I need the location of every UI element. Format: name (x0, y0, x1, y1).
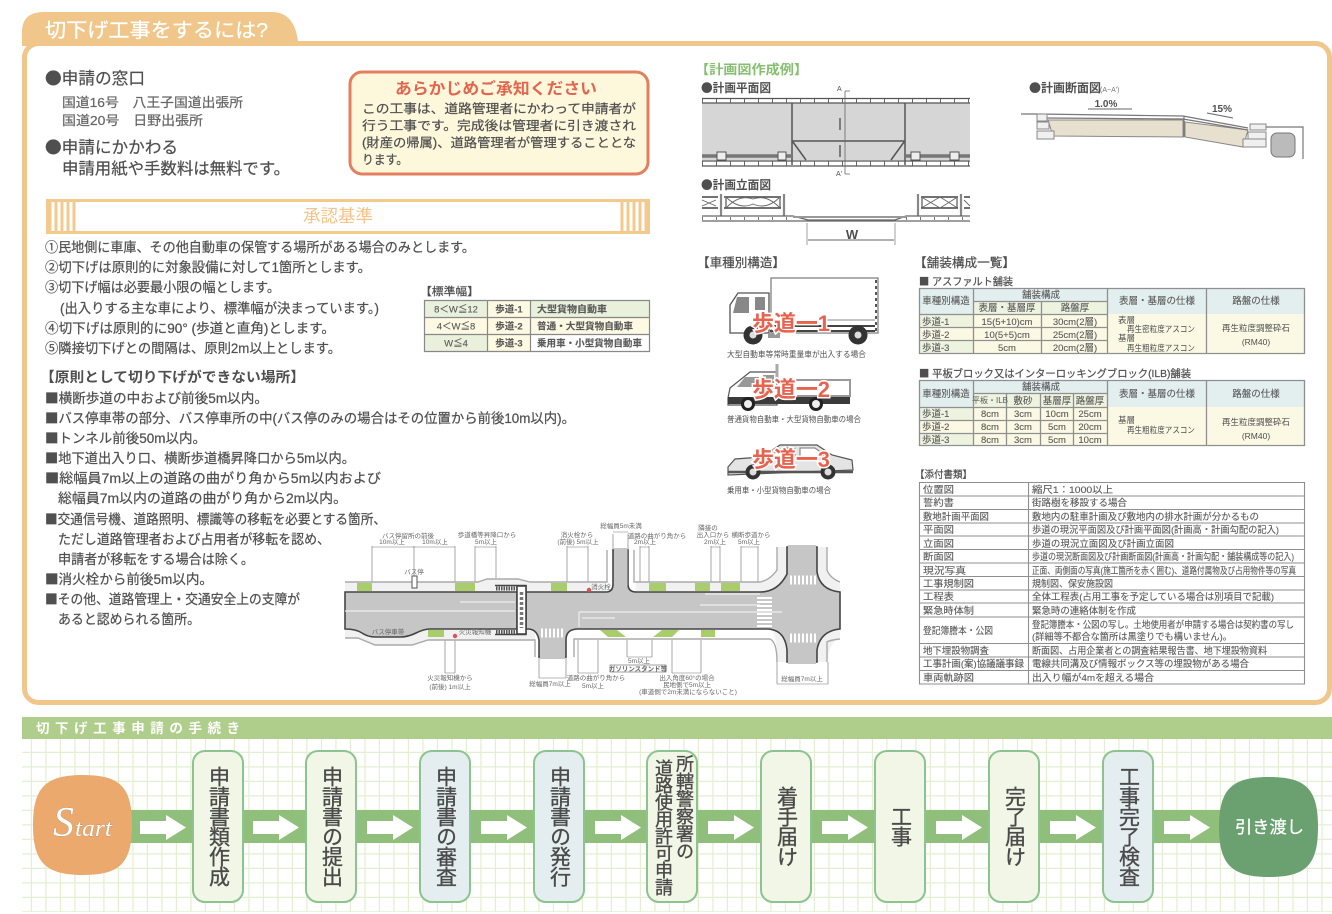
callout: please note: この工事は、道路管理者にかわって申請者が (362, 101, 637, 116)
table: asphalt pavement: 10(5+5)cm (984, 330, 1030, 341)
list: places where cuts are not allowed: ■トンネル前後50m以内。 (45, 427, 206, 447)
list: approval criteria items: ①民地側に車庫、その他自動車の保管する場所がある場合のみとします。 (45, 240, 475, 255)
heading: procedure title: 切下げ工事申請の手続き (36, 720, 240, 736)
table: standard width: 歩道-3 (495, 338, 523, 350)
table: asphalt pavement: 路盤厚 (1061, 302, 1090, 314)
step: completion inspection (1103, 751, 1153, 902)
text block: application office: ●申請の窓口 (45, 65, 145, 89)
heading tab: 切下げ工事をするには? (45, 19, 268, 42)
table: block pavement: 8cm (981, 435, 999, 446)
table: block pavement: 表層・基層の仕様 (1119, 388, 1195, 400)
table: block pavement: 8cm (981, 422, 999, 433)
green planting strips (357, 583, 740, 637)
step: start notice (761, 751, 811, 902)
table: attached documents (915, 468, 1305, 684)
table: standard width: 普通・大型貨物自動車 (537, 320, 633, 332)
table: asphalt pavement: 再生粗粒度アスコン (1127, 343, 1195, 353)
table: attached documents: 工事計画(案)協議議事録 (923, 658, 1024, 670)
diagram: section view: ●計画断面図 (1029, 79, 1101, 96)
list: places where cuts are not allowed: 【原則として切り下げができない場所】 (40, 369, 305, 385)
table: block pavement: 平板・ILB (972, 395, 1008, 405)
table: block pavement: 歩道-1 (922, 408, 949, 420)
road labels: (車道側で2m未満にならないこと) (639, 687, 737, 696)
heading: plan drawing example: 【計画図作成例】 (695, 62, 808, 77)
road labels: 火災報知機から (427, 673, 473, 682)
table: asphalt pavement: 基層 (1118, 333, 1135, 343)
road labels: 5m以上 (628, 656, 651, 665)
road labels: 2m以上 (634, 537, 657, 546)
start badge: S (53, 800, 74, 846)
diagram: plan view: ●計画平面図 (701, 79, 771, 96)
table: attached documents: 緊急時体制 (923, 605, 974, 617)
table: block pavement: 再生粒度調整砕石 (1222, 417, 1290, 427)
table: block pavement: 3cm (1014, 435, 1032, 446)
road labels: バス停車帯 (372, 627, 405, 636)
table: asphalt pavement: (RM40) (1242, 337, 1270, 347)
road diagram (345, 521, 840, 696)
list: places where cuts are not allowed: ■その他、道路管理上・交通安全上の支障が (45, 588, 300, 608)
step: issue: 申請書の発行 (548, 766, 571, 887)
step: submit: 申請書の提出 (320, 766, 343, 887)
road labels: バス停留所の前後 (382, 531, 434, 540)
table: attached documents: 敷地内の駐車計画及び敷地内の排水計画が分かるもの (1032, 511, 1259, 523)
road labels: 2m以上 (704, 537, 727, 546)
step: police permit: 道路使用許可申請 (653, 759, 673, 897)
road labels: 消火栓から (561, 530, 593, 539)
text block: application fees (45, 134, 290, 178)
table: block pavement: 車種別構造 (922, 388, 970, 400)
icon: passenger car: 乗用車・小型貨物自動車の場合 (727, 485, 831, 495)
table: asphalt pavement (919, 274, 1305, 354)
diagram: section view: (A−A') (1100, 87, 1119, 94)
flow bar (125, 810, 1225, 843)
table: standard width: 歩道-1 (495, 304, 523, 316)
table: asphalt pavement: 表層・基層の仕様 (1119, 295, 1195, 307)
road labels: 歩道橋等昇降口から (458, 530, 516, 539)
callout: please note: (財産の帰属)、道路管理者が管理することとな (362, 135, 636, 150)
road labels: 出入角度60°の場合 (659, 673, 715, 682)
table: block pavement: 3cm (1014, 409, 1032, 420)
table: block pavement: 20cm (1078, 422, 1102, 433)
step: completion notice (989, 751, 1039, 902)
diagram: elevation view: ●計画立面図 (701, 176, 771, 193)
table: attached documents: 歩道の現況立面図及び計画立面図 (1032, 538, 1174, 550)
road labels: 民地側で5m以上 (663, 680, 712, 689)
table: attached documents: 断面図 (923, 551, 954, 563)
list: places where cuts are not allowed (40, 369, 575, 627)
table: asphalt pavement: 歩道-2 (922, 329, 949, 341)
table: block pavement: (RM40) (1242, 431, 1270, 441)
callout: please note: あらかじめご承知ください (395, 79, 597, 98)
table: attached documents: 出入り幅が4mを超える場合 (1032, 672, 1155, 684)
table: asphalt pavement: 再生密粒度アスコン (1127, 324, 1195, 334)
diagram: section view (1021, 79, 1303, 159)
road dimension lines (372, 534, 828, 684)
road labels: バス停 (404, 567, 424, 576)
table: attached documents: 電線共同溝及び情報ボックス等の埋設物がある場合 (1032, 658, 1249, 670)
table: asphalt pavement: 25cm(2層) (1053, 330, 1097, 341)
diagram: plan view: A (837, 86, 842, 93)
icon: passenger car: 歩道一3 (752, 447, 830, 472)
diagram: section view: 1.0% (1095, 99, 1118, 110)
list: approval criteria items: ④切下げは原則的に90° (歩道と直角)とします。 (45, 321, 335, 336)
table: attached documents: 全体工程表(占用工事を予定している場合は別項目で記載) (1032, 591, 1274, 603)
sidewalk fill (345, 547, 840, 662)
road labels: 5m以上 (582, 681, 605, 690)
road labels: 火災報知機 (459, 627, 492, 636)
table: block pavement: 3cm (1014, 422, 1032, 433)
table: asphalt pavement: 表層・基層厚 (978, 302, 1036, 314)
table: block pavement: 5cm (1048, 422, 1066, 433)
table: block pavement: 10cm (1045, 409, 1069, 420)
table: block pavement: 8cm (981, 409, 999, 420)
step: police permit (647, 751, 697, 902)
table: block pavement: 敷砂 (1013, 395, 1033, 407)
text block: application fees: ●申請にかかわる (45, 134, 178, 158)
road labels: 総幅員7m以上 (529, 679, 571, 688)
table: asphalt pavement: 歩道-1 (922, 316, 949, 328)
table: asphalt pavement: 15(5+10)cm (982, 317, 1033, 328)
road labels: 道路の曲がり角から (567, 673, 625, 682)
banner: approval criteria: 承認基準 (303, 206, 373, 226)
table: attached documents: 地下埋設物調査 (923, 645, 989, 657)
start badge (33, 775, 132, 875)
table: attached documents: 縮尺1：1000以上 (1032, 484, 1114, 496)
bus stop and hydrant marks (412, 576, 591, 638)
diagram: plan view: A' (836, 171, 842, 178)
road labels: 消火栓 (591, 582, 611, 591)
table: attached documents: 断面図、占用企業者との調査結果報告書、地下埋設物資料 (1032, 645, 1267, 657)
step: submit (306, 751, 356, 902)
icon: large truck: 大型自動車等常時重量車が出入する場合 (727, 349, 866, 359)
diagram: elevation view: W (846, 227, 859, 242)
list: places where cuts are not allowed: ■横断歩道の中および前後5m以内。 (45, 387, 268, 407)
road labels: ガソリンスタンド等 (609, 664, 668, 673)
list: places where cuts are not allowed: 申請者が移転をする場合は除く。 (58, 552, 254, 567)
diagram: plan view (701, 79, 970, 178)
table: standard width: 8＜W≦12 (434, 304, 478, 316)
table: asphalt pavement: 歩道-3 (922, 342, 949, 354)
end badge: handover (1219, 777, 1318, 877)
text block: application office: 国道16号 八王子国道出張所 (62, 95, 243, 110)
table: block pavement: 基層厚 (1043, 395, 1072, 407)
table: block pavement: 路盤厚 (1076, 395, 1105, 407)
banner: approval criteria (48, 200, 648, 233)
heading tab (22, 12, 298, 50)
arrows between steps (140, 815, 1210, 840)
road labels: 5m以上 (475, 537, 498, 546)
table: standard width: W≦4 (444, 338, 468, 350)
list: places where cuts are not allowed: あると認められる箇所。 (58, 611, 200, 627)
table: asphalt pavement: 表層 (1118, 315, 1135, 325)
table: asphalt pavement: 30cm(2層) (1053, 317, 1097, 328)
step: prepare documents: 申請書類作成 (206, 766, 230, 887)
table: asphalt pavement: 20cm(2層) (1053, 343, 1097, 354)
list: approval criteria items (45, 240, 475, 356)
list: places where cuts are not allowed: ただし道路管理者および占用者が移転を認め、 (58, 532, 330, 547)
table: attached documents: 街路樹を移設する場合 (1032, 497, 1127, 509)
table: attached documents: (詳細等不都合な箇所は黒塗りでも構いません)。 (1032, 631, 1232, 643)
table: asphalt pavement: 舗装構成 (1022, 289, 1060, 301)
list: places where cuts are not allowed: ■総幅員7m以上の道路の曲がり角から5m以内および (45, 467, 382, 487)
table: block pavement: 歩道-2 (922, 421, 949, 433)
table: attached documents: 車両軌跡図 (923, 672, 974, 684)
table: standard width: 【標準幅】 (420, 284, 479, 298)
table: block pavement: 25cm (1078, 409, 1102, 420)
table: standard width: 大型貨物自動車 (537, 304, 608, 316)
table: standard width (420, 284, 650, 352)
list: approval criteria items: ⑤隣接切下げとの間隔は、原則2m以上とします。 (45, 341, 341, 356)
road labels: (前後) 5m以上 (557, 537, 599, 546)
list: approval criteria items: ②切下げは原則的に対象設備に対して1箇所とします。 (45, 259, 371, 275)
road labels (372, 521, 823, 696)
table: standard width: 乗用車・小型貨物自動車 (537, 338, 642, 350)
diagram: section view: 15% (1212, 104, 1232, 115)
table: asphalt pavement: 再生粒度調整砕石 (1222, 323, 1290, 333)
icon: large truck (727, 278, 878, 359)
table: standard width: 歩道-2 (495, 320, 523, 332)
panel: main orange frame (22, 12, 1330, 702)
end badge: handover: 引き渡し (1235, 818, 1304, 837)
sidewalk outlines (345, 547, 840, 662)
table: asphalt pavement: 5cm (998, 343, 1016, 354)
text block: application office: 国道20号 日野出張所 (62, 113, 203, 128)
table: attached documents: 現況写真 (923, 565, 967, 577)
list: places where cuts are not allowed: ■交通信号機、道路照明、標識等の移転を必要とする箇所、 (45, 508, 386, 528)
step: review (420, 751, 470, 902)
road labels: 総幅員5m未満 (600, 521, 642, 530)
table: attached documents: 誓約書 (923, 497, 954, 509)
callout: please note: 行う工事です。完成後は管理者に引き渡され (362, 118, 637, 133)
road labels: 総幅員7m以上 (781, 674, 823, 683)
table: block pavement: 舗装構成 (1022, 381, 1060, 393)
text block: application fees: 申請用紙や手数料は無料です。 (62, 160, 290, 178)
table: attached documents: 歩道の現況平面図及び計画平面図(計画高・計画勾配の記入) (1032, 524, 1279, 536)
start badge: tart (75, 816, 113, 842)
table: block pavement: ■ 平板ブロック又はインターロッキングブロック(ILB)舗装 (919, 366, 1191, 381)
step: prepare documents (193, 751, 243, 902)
table: asphalt pavement: 路盤の仕様 (1232, 295, 1280, 307)
icon: medium truck (727, 364, 861, 424)
road markings (345, 594, 782, 627)
road labels: 出入口から (697, 530, 729, 539)
list: places where cuts are not allowed: ■消火栓から前後5m以内。 (45, 568, 213, 588)
table: attached documents: 【添付書類】 (915, 468, 972, 481)
list: places where cuts are not allowed: 総幅員7m以内の道路の曲がり角から2m以内。 (58, 491, 347, 506)
table: attached documents: 工程表 (923, 592, 955, 603)
road labels: 10m以上 (379, 537, 405, 546)
road surface (345, 592, 517, 637)
icon: medium truck: 普通貨物自動車・大型貨物自動車の場合 (727, 414, 861, 424)
diagram: elevation view (701, 176, 970, 245)
road labels: 横断歩道から (732, 530, 770, 539)
icon: passenger car (727, 445, 853, 495)
table: block pavement: 路盤の仕様 (1232, 388, 1280, 400)
table: attached documents: 規制図、保安施設図 (1032, 578, 1113, 590)
step: review: 申請書の審査 (434, 766, 457, 886)
callout: please note (350, 72, 648, 174)
table: attached documents: 登記簿謄本・公図の写し。土地使用者が申請する場合は契約書の写し (1032, 619, 1294, 631)
road labels: 10m以上 (422, 537, 448, 546)
road labels: 隣接の (698, 523, 718, 532)
table: attached documents: 位置図 (923, 484, 954, 496)
median with hatching (495, 586, 526, 634)
table: block pavement (919, 366, 1305, 446)
table: block pavement: 再生粗粒度アスコン (1127, 425, 1195, 435)
list: approval criteria items: ③切下げ幅は必要最小限の幅とします。 (45, 280, 280, 295)
road labels: (前後) 1m以上 (429, 682, 471, 691)
icon: medium truck: 歩道一2 (752, 377, 830, 402)
step: completion notice: 完了届け (1002, 786, 1026, 867)
table: standard width: 4＜W≦8 (437, 320, 475, 332)
table: asphalt pavement: ■ アスファルト舗装 (919, 274, 1013, 289)
table: attached documents: 平面図 (923, 525, 954, 536)
text block: application office (45, 65, 243, 128)
icon: large truck: 歩道一1 (752, 311, 830, 336)
step: police permit: 所轄警察署の (674, 754, 694, 860)
step: completion inspection: 工事完了検査 (1116, 766, 1140, 886)
list: places where cuts are not allowed: ■バス停車帯の部分、バス停車所の中(バス停のみの場合はその位置から前後10m以内)。 (45, 407, 575, 427)
table: attached documents: 立面図 (923, 538, 954, 550)
list: approval criteria items: (出入りする主な車により、標準幅が決まっています。) (60, 301, 379, 316)
road labels: 5m以上 (738, 537, 761, 546)
table: attached documents: 緊急時の連絡体制を作成 (1032, 605, 1136, 617)
table: block pavement: 基層 (1118, 415, 1135, 425)
table: asphalt pavement: 車種別構造 (922, 295, 970, 307)
callout: please note: ります。 (362, 153, 408, 167)
list: places where cuts are not allowed: ■地下道出入り口、横断歩道橋昇降口から5m以内。 (45, 447, 355, 467)
table: block pavement: 歩道-3 (922, 434, 949, 446)
table: attached documents: 登記簿謄本・公図 (923, 625, 993, 637)
step: issue (534, 751, 584, 902)
table: block pavement: 10cm (1078, 435, 1102, 446)
heading: vehicle type structure: 【車種別構造】 (697, 256, 785, 270)
table: attached documents: 敷地計画平面図 (923, 511, 989, 523)
road labels: 道路の曲がり角から (628, 531, 686, 540)
panel: application procedure (22, 717, 1332, 912)
table: block pavement: 5cm (1048, 435, 1066, 446)
step: construction: 工事 (888, 806, 912, 847)
step: construction (875, 751, 925, 902)
step: start notice: 着手届け (774, 786, 798, 867)
heading: pavement list: 【舗装構成一覧】 (914, 255, 1015, 270)
heading: procedure title (22, 717, 1332, 739)
table: attached documents: 工事規制図 (923, 578, 974, 590)
